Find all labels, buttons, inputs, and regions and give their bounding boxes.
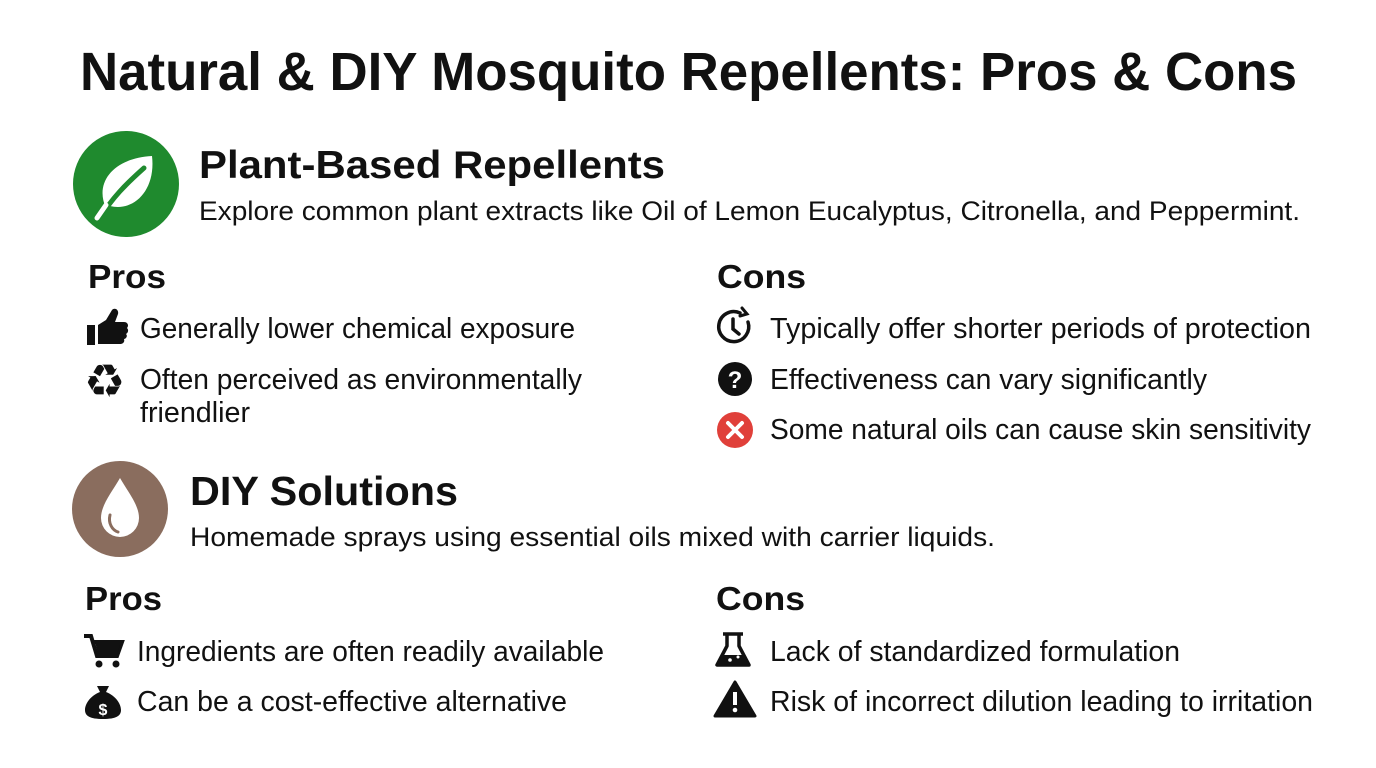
cons: plant-based: Typically offer shorter periods of protection [770,313,1311,345]
heading: plant-based: Plant-Based Repellents [199,144,665,187]
icon: drop [72,461,168,557]
icon: money bag: $ [99,702,108,719]
subtitle: plant-based: Explore common plant extracts like Oil of Lemon Eucalyptus, Citronella, and Peppermint. [199,196,1300,226]
cons: DIY: Cons [716,580,805,617]
panel: plant-based repellents [73,131,1311,448]
icon: red x [717,412,753,448]
cons: plant-based [717,258,1311,448]
icon: cart [84,636,122,668]
cons: DIY: Risk of incorrect dilution leading to irritation [770,686,1313,718]
pros: DIY: Can be a cost-effective alternative [137,686,567,718]
pros: DIY: Pros [85,580,162,617]
cons: DIY [715,580,1313,718]
icon: question [718,362,752,396]
panel: DIY solutions [72,461,1313,719]
pros: DIY [84,580,604,719]
icon: leaf [73,131,179,237]
heading: DIY: DIY Solutions [190,468,458,514]
cons: plant-based: Some natural oils can cause skin sensitivity [770,414,1311,446]
subtitle: DIY: Homemade sprays using essential oils mixed with carrier liquids. [190,522,995,552]
title: Natural & DIY Mosquito Repellents: Pros & Cons [80,42,1297,102]
cons: plant-based: ? [728,367,742,394]
icon: flask [717,634,749,665]
cons: plant-based: Effectiveness can vary significantly [770,364,1207,396]
icon: thumbs up [87,309,128,345]
pros: plant-based: Generally lower chemical exposure [140,313,575,345]
pros: DIY: Ingredients are often readily available [137,636,604,668]
cons: plant-based: Cons [717,258,806,295]
pros: plant-based: Often perceived as environmentally [140,364,582,396]
pros: plant-based: Pros [88,258,166,295]
icon: money bag [85,686,121,719]
icon: recycle: ♻ [84,355,125,407]
cons: DIY: Lack of standardized formulation [770,636,1180,668]
icon: warning [715,682,755,716]
icon: clock [719,308,749,342]
pros: plant-based: friendlier [140,397,250,429]
pros: plant-based [84,258,582,429]
